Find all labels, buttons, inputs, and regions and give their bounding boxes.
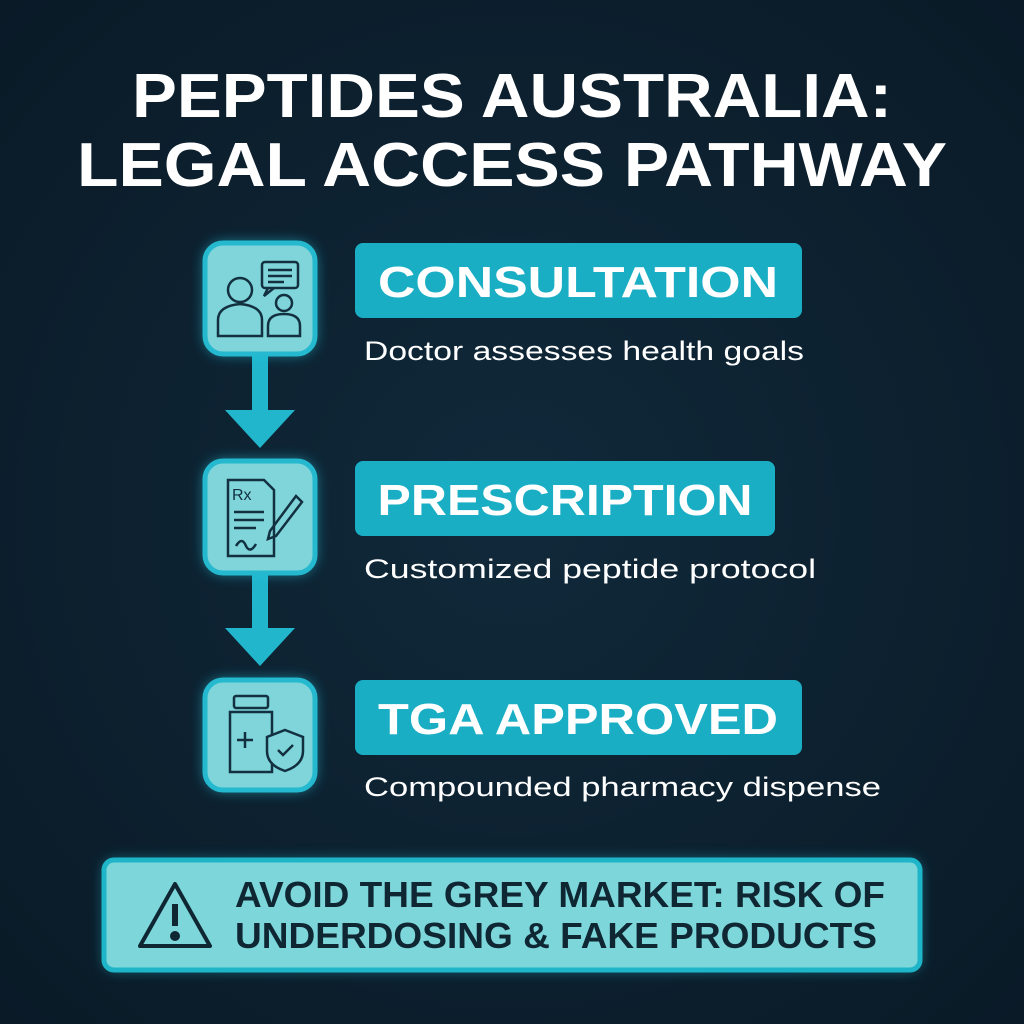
icon: TGA approved medicine [205,680,315,790]
title: LEGAL ACCESS PATHWAY [77,131,947,200]
step 1 description: Doctor assesses health goals [364,336,804,366]
step 3 heading: TGA APPROVED [378,695,778,744]
step 1 heading: CONSULTATION [378,258,778,307]
callout: grey market warning: AVOID THE GREY MARKET: RISK OF [235,874,885,915]
icon: prescription [205,461,315,573]
step 2 description: Customized peptide protocol [364,554,816,584]
callout: grey market warning [104,860,920,970]
step 3 heading [355,680,802,755]
icon: warning triangle [140,884,210,946]
step 1 heading [355,243,802,318]
icon: consultation [205,243,315,354]
title [77,62,947,200]
step 2 heading: PRESCRIPTION [378,476,752,525]
title: PEPTIDES AUSTRALIA: [132,62,892,131]
callout: grey market warning: UNDERDOSING & FAKE PRODUCTS [235,915,877,956]
icon: prescription: Rx [232,487,252,504]
step 3 description: Compounded pharmacy dispense [364,772,881,802]
arrow: step 2 to 3 [225,570,295,666]
arrow: step 1 to 2 [225,350,295,448]
step 2 heading [355,461,775,536]
